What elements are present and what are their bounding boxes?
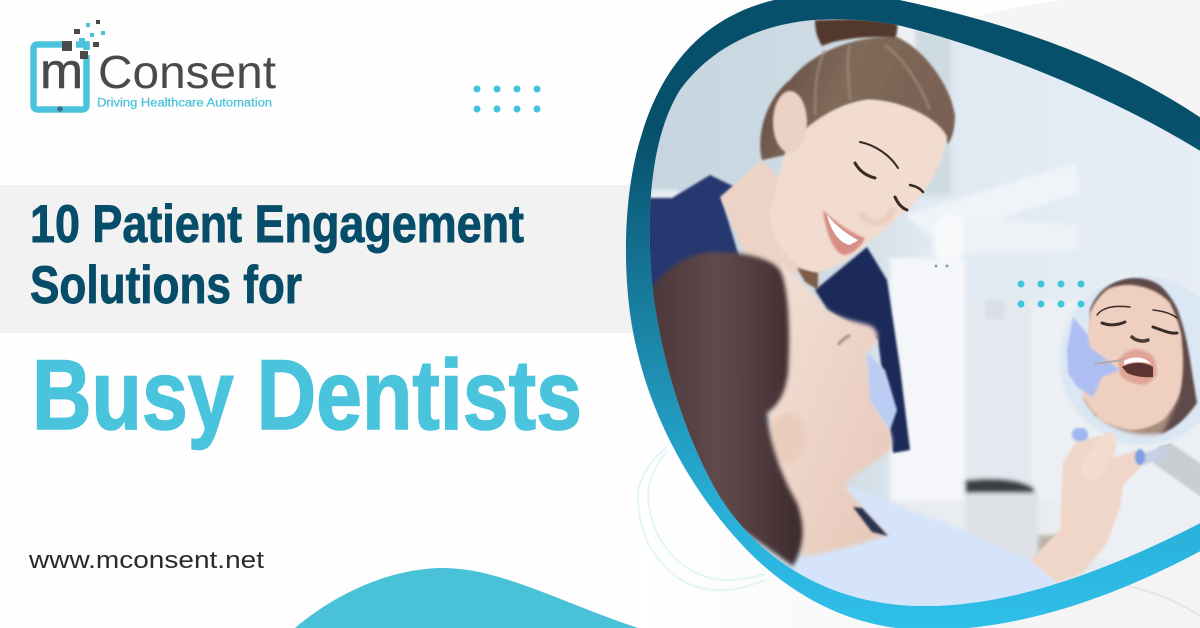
mirror face — [1083, 285, 1183, 430]
rings: decorative circles — [638, 447, 765, 590]
mirror hair — [1090, 278, 1197, 433]
patient neck and face — [770, 265, 892, 557]
heading: line two: Solutions for — [30, 256, 302, 315]
dentist nose shadow — [860, 208, 893, 223]
mirror teeth — [1124, 358, 1151, 365]
patient arm and hand — [1030, 432, 1145, 583]
thumb over mirror — [1082, 432, 1116, 482]
dentist smile — [823, 210, 865, 255]
mirror dental tool — [1095, 360, 1122, 364]
wave: bottom — [295, 568, 638, 628]
top right grey shape — [975, 0, 1200, 130]
mirror handle — [1153, 442, 1200, 497]
dentist face — [770, 100, 947, 272]
mirror reflection — [1067, 278, 1197, 434]
arc: bottom right — [1128, 586, 1200, 616]
website url: www.mconsent.net — [28, 547, 264, 574]
mirror nostrils — [1132, 337, 1148, 341]
mirror lips — [1118, 349, 1157, 385]
icon: tablet frame — [34, 44, 86, 110]
logo tagline: Driving Healthcare Automation — [97, 98, 272, 110]
dentist hair — [760, 37, 955, 160]
heading: line one: 10 Patient Engagement — [30, 195, 524, 254]
mirror glove — [1067, 317, 1120, 397]
heading: busy dentists: Busy Dentists — [32, 339, 582, 450]
blob frame — [626, 0, 1200, 628]
glove finger tip — [1135, 449, 1145, 465]
title band — [0, 185, 640, 333]
bottom right grey background — [640, 450, 1200, 628]
mirror brows and eyes — [1097, 306, 1177, 333]
dots: top — [474, 86, 540, 112]
dentist eyes and brows — [855, 142, 923, 210]
patient hair — [640, 252, 803, 566]
patient ear — [769, 413, 807, 463]
dentist ear — [773, 91, 807, 153]
photo: dentist and patient — [640, 0, 1200, 628]
logo wordmark Consent: Consent — [98, 46, 276, 98]
dots: over photo — [1018, 280, 1084, 308]
logo wordmark m: m — [40, 43, 83, 99]
photo clinic equipment — [650, 20, 1200, 565]
mirror clip — [1143, 446, 1168, 466]
dentist neck — [720, 160, 820, 280]
dentist uniform left — [645, 175, 740, 310]
mirror neck shadow — [1083, 395, 1180, 434]
dentist uniform right — [815, 247, 910, 453]
dentist neck shadow — [797, 268, 818, 290]
photo wall — [640, 0, 1200, 628]
patient collar — [853, 507, 888, 536]
mirror mouth interior — [1122, 363, 1153, 377]
dentist hair bun — [815, 18, 897, 46]
dentist hair strands — [815, 45, 930, 115]
patient mask glove — [867, 353, 897, 430]
mirror — [1059, 274, 1200, 465]
patient eye — [838, 335, 850, 345]
patient gown — [791, 486, 1058, 606]
mirror glass — [1059, 274, 1200, 446]
glove thumb on mirror — [1072, 428, 1088, 441]
icon: pixel squares — [57, 20, 105, 112]
logo — [34, 20, 276, 112]
